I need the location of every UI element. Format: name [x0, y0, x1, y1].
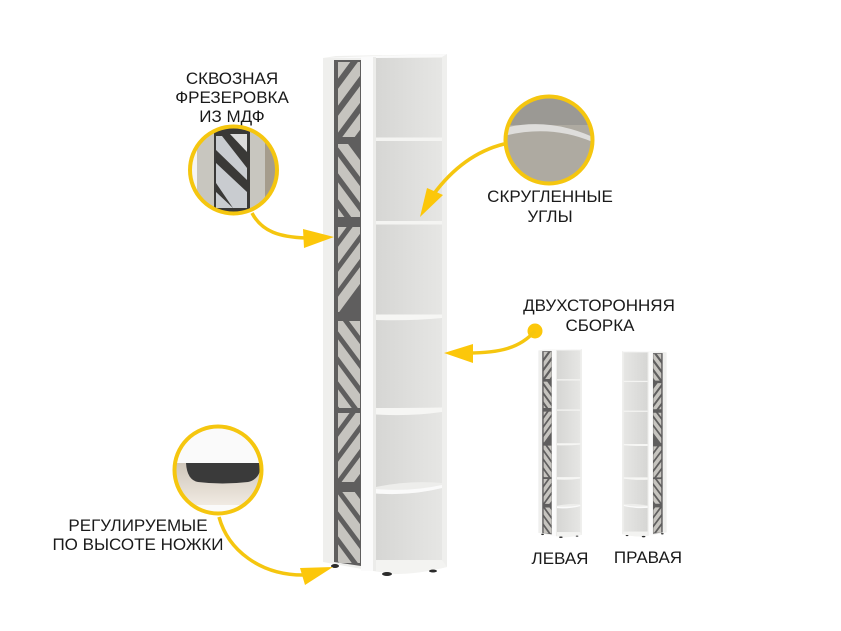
heading: through milling: ИЗ МДФ	[199, 107, 265, 126]
arrow: milling callout to panel	[252, 213, 334, 248]
label: double-sided assembly: СБОРКА	[565, 316, 635, 335]
icon: rounded corners detail circle	[504, 94, 594, 186]
icon: milling detail circle	[188, 124, 279, 216]
label: left: ЛЕВАЯ	[532, 549, 588, 568]
label: adjustable feet	[52, 516, 224, 554]
label: adjustable feet: ПО ВЫСОТЕ НОЖКИ	[52, 535, 224, 554]
heading: through milling: ФРЕЗЕРОВКА	[175, 88, 289, 107]
arrow: double-sided assembly with dot	[444, 324, 542, 363]
main corner shelf unit	[323, 27, 447, 596]
icon: adjustable foot detail circle	[170, 425, 270, 515]
label: adjustable feet: РЕГУЛИРУЕМЫЕ	[68, 516, 208, 535]
label: double-sided assembly: ДВУХСТОРОННЯЯ	[523, 296, 675, 315]
small shelf: right assembly	[622, 341, 667, 544]
arrow: rounded corners callout to shelf	[420, 144, 504, 217]
arrow: adjustable foot callout to leg	[219, 517, 333, 585]
small shelf: left assembly	[538, 339, 582, 545]
label: rounded corners: СКРУГЛЕННЫЕ	[487, 187, 613, 206]
heading: through milling	[175, 69, 289, 126]
label: double-sided assembly	[523, 296, 675, 335]
label: rounded corners	[487, 187, 613, 226]
label: right: ПРАВАЯ	[614, 548, 682, 567]
label: rounded corners: УГЛЫ	[527, 207, 573, 226]
heading: through milling: СКВОЗНАЯ	[186, 69, 278, 88]
